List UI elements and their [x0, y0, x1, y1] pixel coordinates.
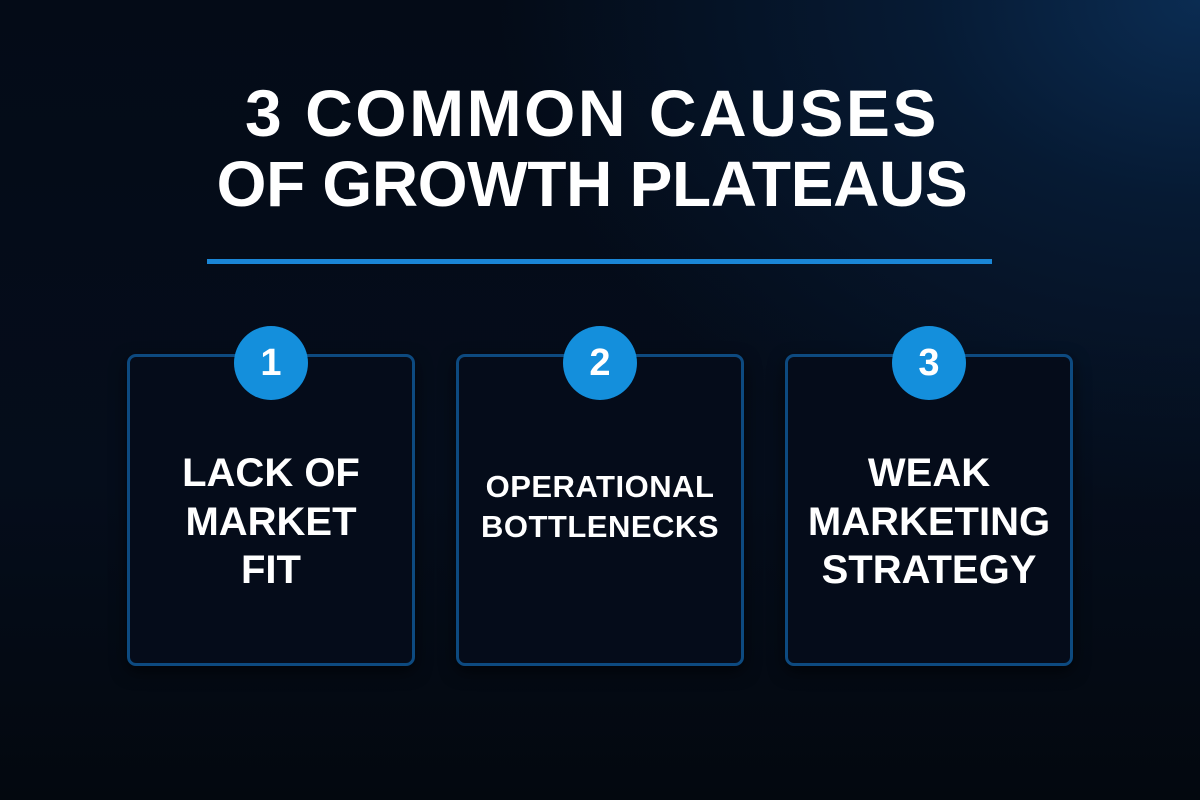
text: operational bottlenecks [481, 469, 719, 544]
title: 3 COMMON CAUSES [245, 76, 939, 150]
panel: cause 2 [456, 354, 744, 666]
title underline [207, 259, 992, 264]
text: lack of market fit: LACK OF [182, 451, 360, 495]
title: OF GROWTH PLATEAUS [217, 148, 967, 220]
panel: cause 3 [785, 354, 1073, 666]
badge 2: 2 [589, 342, 611, 384]
text: weak marketing strategy: WEAK [868, 451, 990, 495]
badge 3 [892, 326, 966, 400]
badge 2 [563, 326, 637, 400]
badge 1: 1 [260, 342, 282, 384]
badge 1 [234, 326, 308, 400]
text: operational bottlenecks: OPERATIONAL [486, 469, 714, 504]
text: weak marketing strategy: MARKETING [808, 500, 1050, 544]
text: operational bottlenecks: BOTTLENECKS [481, 509, 719, 544]
text: lack of market fit: MARKET [185, 500, 357, 544]
title [217, 76, 967, 220]
panel: cause 1 [127, 354, 415, 666]
text: weak marketing strategy [808, 451, 1050, 592]
badge 3: 3 [918, 342, 940, 384]
text: weak marketing strategy: STRATEGY [822, 548, 1036, 592]
text: lack of market fit: FIT [241, 548, 301, 592]
text: lack of market fit [182, 451, 360, 592]
